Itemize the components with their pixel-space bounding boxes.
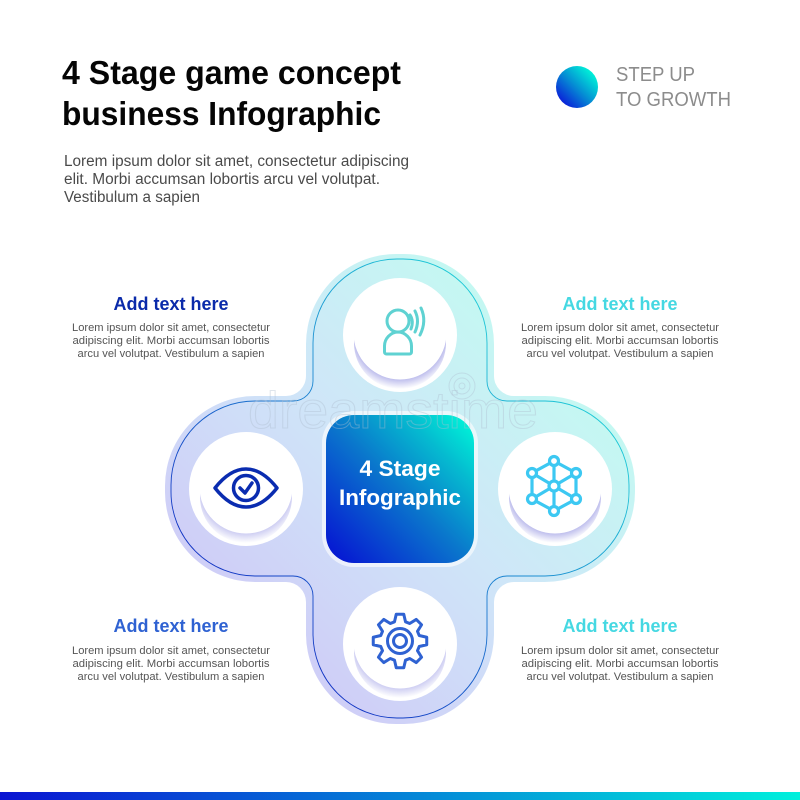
logo tagline: TO GROWTH (616, 89, 731, 111)
stage 1 medallion: top (343, 278, 457, 392)
text block: top left: Add text here (114, 294, 228, 314)
icon: gear (373, 614, 427, 668)
panel: cross shape (165, 254, 635, 724)
text block: bottom left: arcu vel volutpat. Vestibulum a sapien (78, 671, 264, 683)
center tile text (339, 456, 461, 510)
text block: bottom right: arcu vel volutpat. Vestibulum a sapien (526, 671, 714, 683)
title: business Infographic (62, 95, 381, 132)
text block: top left (72, 294, 270, 360)
text block: bottom right (521, 616, 719, 683)
stage 2 medallion: left (189, 432, 303, 546)
text block: bottom left (72, 616, 270, 683)
icon: hexagon network (528, 456, 580, 516)
intro paragraph: Vestibulum a sapien (64, 189, 200, 206)
icon: eye with check (215, 469, 277, 507)
text block: top right (521, 294, 719, 360)
bottom gradient bar (0, 792, 800, 800)
text block: bottom right: adipiscing elit. Morbi accumsan lobortis (522, 658, 719, 670)
intro paragraph: Lorem ipsum dolor sit amet, consectetur adipiscing (64, 153, 409, 170)
text block: top right: Lorem ipsum dolor sit amet, consectetur (521, 322, 719, 334)
title (62, 54, 401, 132)
center tile (322, 411, 478, 567)
text block: top left: arcu vel volutpat. Vestibulum a sapien (78, 348, 264, 360)
icon: person speaking (384, 308, 424, 354)
logo tagline (616, 64, 731, 111)
watermark: dreamstime (248, 382, 538, 440)
text block: bottom left: Lorem ipsum dolor sit amet, consectetur (72, 645, 270, 657)
text block: bottom left: Add text here (114, 616, 228, 636)
text block: top right: adipiscing elit. Morbi accumsan lobortis (522, 335, 719, 347)
intro paragraph: elit. Morbi accumsan lobortis arcu vel volutpat. (64, 171, 380, 188)
title: 4 Stage game concept (62, 54, 401, 91)
center tile text: 4 Stage (360, 456, 440, 481)
text block: top left: adipiscing elit. Morbi accumsan lobortis (72, 335, 270, 347)
logo: gradient dot (556, 66, 598, 108)
logo tagline: STEP UP (616, 64, 695, 86)
text block: top left: Lorem ipsum dolor sit amet, consectetur (72, 322, 270, 334)
text block: top right: arcu vel volutpat. Vestibulum a sapien (526, 348, 714, 360)
intro paragraph (64, 153, 409, 206)
stage 3 medallion: right (498, 432, 612, 546)
text block: top right: Add text here (562, 294, 678, 314)
text block: bottom right: Add text here (562, 616, 678, 636)
text block: bottom left: adipiscing elit. Morbi accumsan lobortis (72, 658, 270, 670)
text block: bottom right: Lorem ipsum dolor sit amet, consectetur (521, 645, 719, 657)
stage 4 medallion: bottom (343, 587, 457, 701)
center tile text: Infographic (339, 485, 461, 510)
